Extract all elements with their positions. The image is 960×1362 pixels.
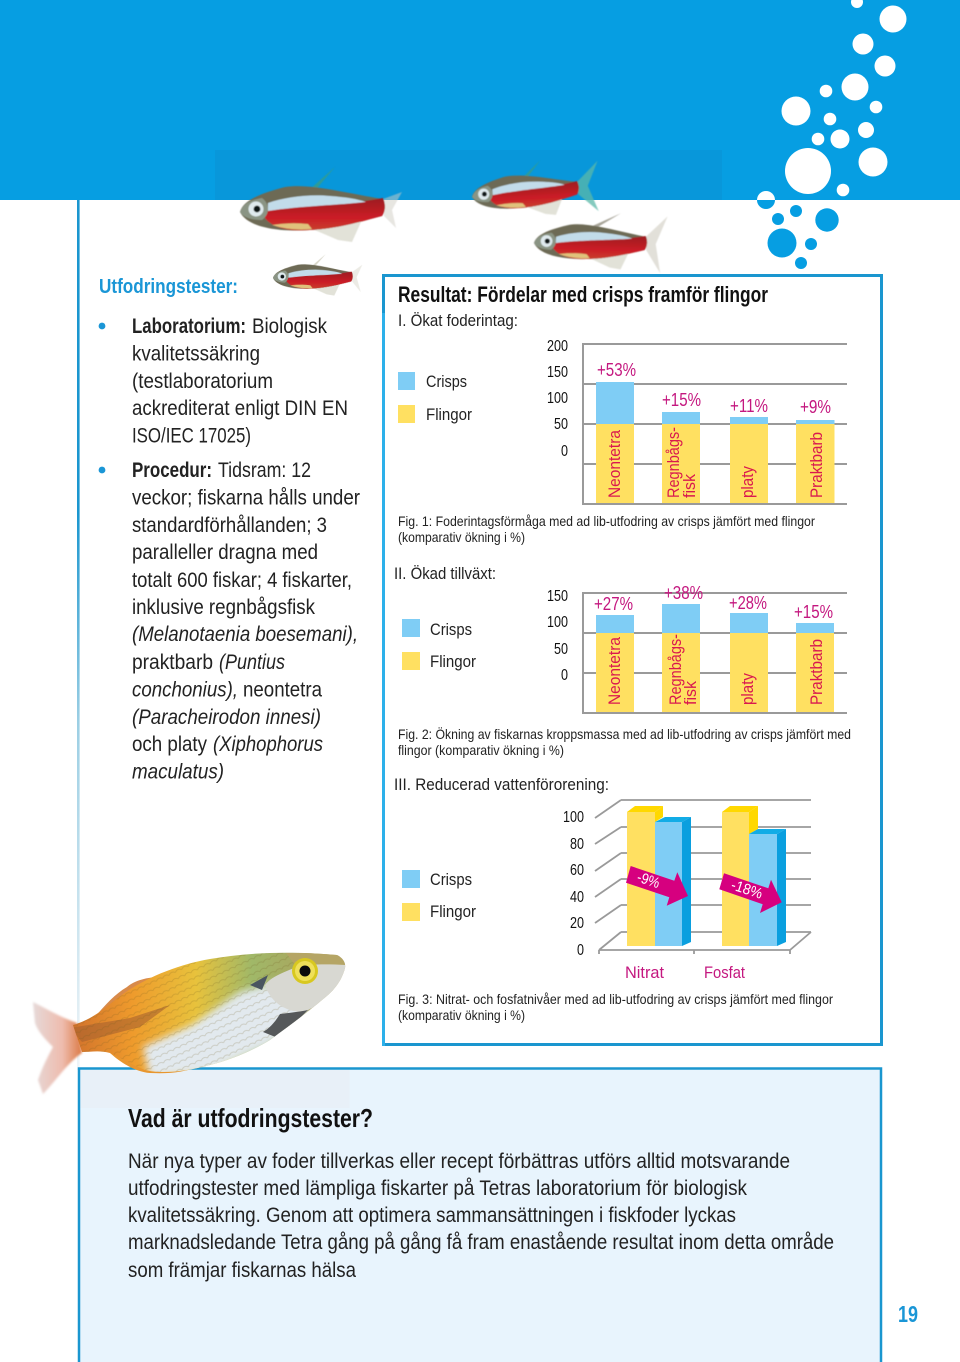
caption: figure 1 [398,513,815,545]
text block: bullet list: conchonius), [132,678,238,702]
panel heading: Resultat: Fördelar med crisps framför flingor [398,282,768,307]
text block: bullet list: ackrediterat enligt DIN EN [132,397,348,420]
arrow: -9% [626,866,688,906]
y axis labels: 40 [570,889,584,906]
percentage labels: +27% [594,594,633,614]
text block: bullet list: kvalitetssäkring [132,342,260,366]
arrow: -18%: -18% [729,877,765,903]
text block: bullet list: ISO/IEC 17025) [132,424,251,448]
text block: bullet list: Biologisk [252,315,327,338]
species labels: platy [738,466,757,498]
caption: figure 1: (komparativ ökning i %) [398,529,525,545]
species labels: fisk [680,474,699,498]
species labels: Praktbarb [807,639,826,705]
text block: bullet list: standardförhållanden; 3 [132,514,327,537]
caption: figure 2: Fig. 2: Ökning av fiskarnas kroppsmassa med ad lib-utfodring av crisps jämfört med [398,725,851,742]
text block: bullet list: Laboratorium: [132,315,246,338]
panel: results [382,276,882,1046]
text block: bullet list: (Xiphophorus [213,733,323,756]
chart: water pollution [402,800,811,982]
percentage labels [594,583,833,622]
y axis labels [547,338,568,460]
legend: Flingor [426,405,472,424]
bars [596,604,834,712]
icon: neon tetra middle [533,210,668,273]
y axis labels: 0 [561,667,568,684]
y axis labels: 100 [547,390,568,407]
y axis labels: 150 [547,364,568,381]
y axis labels: 0 [577,942,584,959]
y axis labels [563,809,584,959]
icon: neon tetra upper right [470,157,600,219]
percentage labels: +15% [662,390,701,410]
page number: 19 [898,1301,918,1327]
3d bars: fosfat [722,806,786,946]
percentage labels: +15% [794,602,833,622]
blue header band [0,0,960,200]
body text [128,1150,834,1282]
3d bars: nitrat [627,806,691,946]
panel: what are feeding tests [79,1068,881,1362]
icon: rainbow fish [33,945,350,1094]
percentage labels [597,360,831,417]
heading: Vad är utfodringstester? [128,1103,373,1133]
text block: bullet list [99,315,360,784]
y axis labels: 50 [554,641,568,658]
species labels: Neontetra [605,430,624,498]
bars [596,382,834,503]
arrow: -9%: -9% [635,869,662,892]
species labels: Praktbarb [807,432,826,498]
legend: Crisps [430,620,472,639]
species labels: fisk [681,681,700,705]
species labels: Regnbågs- [666,634,685,705]
legend: Flingor [430,902,476,921]
chart: growth [402,583,847,714]
text block: bullet list: Tidsram: 12 [218,459,311,482]
caption: figure 3 [398,991,833,1023]
species labels [605,427,826,498]
body text: utfodringstester med lämpliga fiskarter på Tetras laboratorium för biologisk [128,1177,747,1200]
category labels [625,963,745,982]
y axis labels: 0 [561,443,568,460]
caption: figure 2: flingor (komparativ ökning i %) [398,742,564,758]
percentage labels: +11% [730,396,768,416]
caption: figure 3: (komparativ ökning i %) [398,1007,525,1023]
text block: bullet list: neontetra [243,678,322,702]
text block: bullet list: (Paracheirodon innesi) [132,706,321,729]
text block: bullet list: (Puntius [219,651,285,674]
section III heading: III. Reducerad vattenförorening: [394,775,609,794]
text block: bullet list: paralleller dragna med [132,541,318,564]
section II heading: II. Ökad tillväxt: [394,564,496,583]
icon: neon tetra small [273,253,363,296]
body text: som främjar fiskarnas hälsa [128,1259,356,1282]
y axis labels: 150 [547,588,568,605]
text block: bullet list: och platy [132,733,207,756]
legend: Flingor [430,652,476,671]
percentage labels: +38% [664,583,703,603]
category labels: Fosfat [704,963,745,982]
caption: figure 1: Fig. 1: Foderintagsförmåga med ad lib-utfodring av crisps jämfört med flingor [398,513,815,529]
y axis labels: 50 [554,416,568,433]
body text: kvalitetssäkring. Genom att optimera sammansättningen i fiskfoder lyckas [128,1204,736,1227]
bubbles [757,0,906,269]
darker fish image strip [215,150,722,200]
body text: marknadsledande Tetra gång på gång få fram enastående resultat inom detta område [128,1231,834,1254]
species labels: Regnbågs- [664,427,683,498]
y axis labels: 80 [570,836,584,853]
y axis labels: 20 [570,915,584,932]
y axis labels: 100 [563,809,584,826]
species labels: platy [738,673,757,705]
text block: bullet list: (Melanotaenia boesemani), [132,623,358,646]
icon: neon tetra large [240,167,402,242]
text block: bullet list: totalt 600 fiskar; 4 fiskarter, [132,569,352,592]
percentage labels: +9% [800,397,831,417]
legend: Crisps [426,372,467,391]
y axis labels: 100 [547,614,568,631]
y axis labels: 60 [570,862,584,879]
text block: bullet list: veckor; fiskarna hålls under [132,486,360,510]
left vertical rule [77,200,80,1070]
text block: bullet list: (testlaboratorium [132,370,273,393]
species labels [605,634,826,705]
legend [398,372,472,424]
legend [402,870,476,921]
y axis labels [547,588,568,684]
section I heading: I. Ökat foderintag: [398,311,518,330]
legend [402,619,476,671]
caption: figure 2 [398,725,851,758]
chart: feed intake [398,338,847,505]
category labels: Nitrat [625,963,664,982]
legend: Crisps [430,870,472,889]
arrow: -18% [719,873,782,913]
heading: Utfodringstester: Utfodringstester: [99,276,238,298]
percentage labels: +53% [597,360,636,380]
species labels: Neontetra [605,637,624,705]
text block: bullet list: Procedur: [132,459,212,482]
caption: figure 3: Fig. 3: Nitrat- och fosfatnivåer med ad lib-utfodring av crisps jämfört med flingor [398,991,833,1007]
text block: bullet list: inklusive regnbågsfisk [132,596,315,619]
text block: bullet list: maculatus) [132,760,224,784]
y axis labels: 200 [547,338,568,355]
body text: När nya typer av foder tillverkas eller recept förbättras utförs alltid motsvarande [128,1150,790,1173]
percentage labels: +28% [729,593,767,613]
text block: bullet list: praktbarb [132,651,213,674]
